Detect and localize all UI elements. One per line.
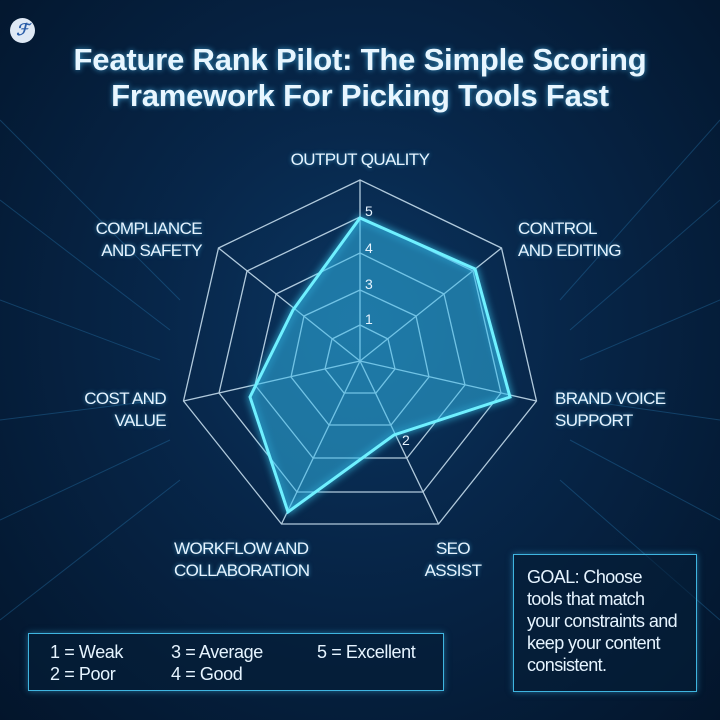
scale numbers: 4 [365, 240, 373, 256]
text: CONTROL [518, 219, 597, 238]
text: BRAND VOICE [555, 389, 666, 408]
scale numbers: 3 [365, 276, 373, 292]
text: AND EDITING [518, 241, 621, 260]
text: COST AND [84, 389, 166, 408]
legend box: 1 = Weak [50, 642, 123, 662]
logo [10, 18, 35, 43]
data polygon [250, 218, 510, 512]
scale numbers: 5 [365, 203, 373, 219]
title [72, 42, 648, 116]
title: Feature Rank Pilot: The Simple Scoring [74, 42, 646, 77]
legend box: 5 = Excellent [317, 642, 415, 662]
goal callout [513, 554, 697, 692]
legend box: 2 = Poor [50, 664, 115, 684]
scale numbers [365, 203, 410, 448]
goal callout: consistent. [527, 655, 606, 675]
legend box: 4 = Good [171, 664, 242, 684]
text: COMPLIANCE [96, 219, 202, 238]
text: VALUE [114, 411, 166, 430]
goal callout: keep your content [527, 633, 660, 653]
goal callout: GOAL: Choose [527, 567, 642, 587]
text: SUPPORT [555, 411, 633, 430]
legend box [28, 633, 444, 691]
text: ASSIST [425, 561, 481, 580]
text: SEO [436, 539, 470, 558]
text: WORKFLOW AND [174, 539, 308, 558]
goal callout: your constraints and [527, 611, 677, 631]
scale numbers: 1 [365, 311, 373, 327]
text: AND SAFETY [101, 241, 202, 260]
axis labels: OUTPUT QUALITY [291, 150, 429, 169]
title: Framework For Picking Tools Fast [111, 78, 609, 113]
scale numbers: 2 [402, 432, 410, 448]
text: COLLABORATION [174, 561, 309, 580]
logo: ℱ [16, 22, 29, 39]
legend box: 3 = Average [171, 642, 263, 662]
goal callout: tools that match [527, 589, 644, 609]
